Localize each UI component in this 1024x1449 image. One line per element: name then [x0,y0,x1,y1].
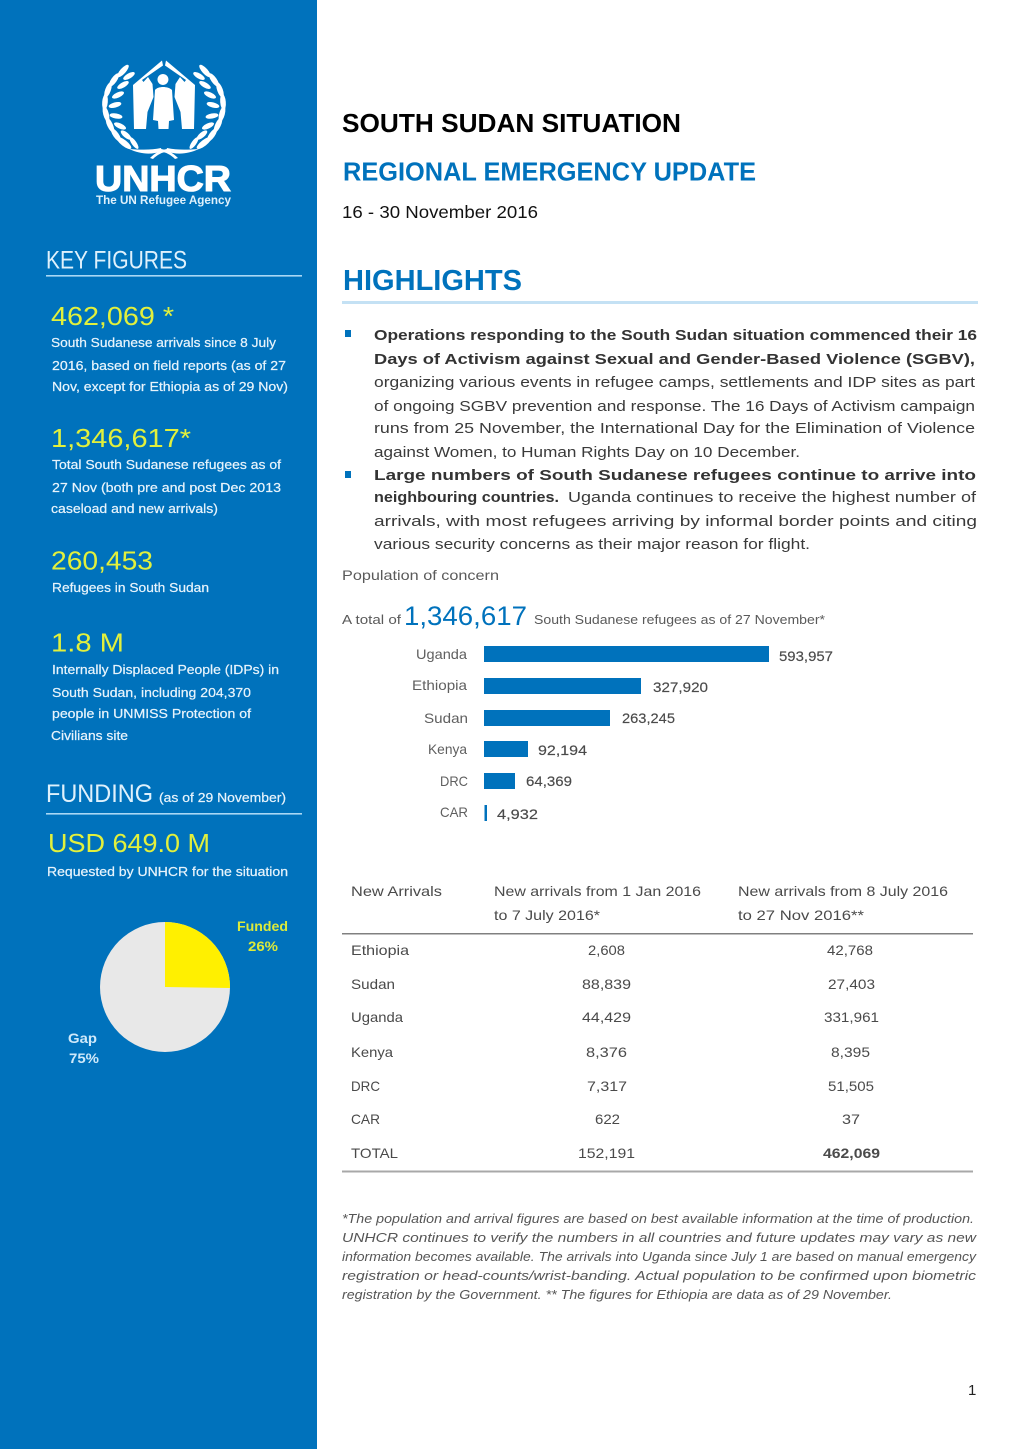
row: Kenya: 8,395 [831,1044,870,1060]
icon: wreath right [160,63,227,159]
pie chart: funding: Gap [68,1031,97,1046]
bullet text 1: of ongoing SGBV prevention and response. The 16 Days of Activism campaign [374,398,975,415]
text block: footnote: *The population and arrival figures are based on best available information at the time of production. [342,1212,974,1226]
row: total [342,1145,973,1172]
key figure: IDPs: people in UNMISS Protection of [52,707,252,721]
row: Kenya: Kenya [351,1044,393,1060]
key figure: refugees: Total South Sudanese refugees as of [52,458,282,472]
bullet text 2: neighbouring countries. [374,489,559,506]
callout: total refugees: South Sudanese refugees as of 27 November* [534,613,825,627]
row: Uganda [351,1009,879,1025]
row: total: TOTAL [351,1145,398,1161]
bullet text 1: Operations responding to the South Sudan situation commenced their 16 [374,327,977,344]
key figure: refugees [51,423,282,516]
row: Uganda: Uganda [351,1009,403,1025]
row: total: 152,191 [578,1145,635,1161]
bullet text 1: against Women, to Human Rights Day on 10 December. [374,444,800,461]
bullet marker 2 [345,471,351,478]
icon: wreath left [101,63,168,159]
table: new arrivals [342,883,973,1172]
key figure: refugees: 1,346,617* [51,423,191,453]
table header: New arrivals from 1 Jan 2016 [494,883,701,899]
row: Ethiopia [351,942,873,958]
bar: DRC [440,773,572,789]
callout: total refugees [342,601,825,631]
bullet text 1: runs from 25 November, the International Day for the Elimination of Violence [374,420,975,437]
funding amount: USD 649.0 M [48,828,210,858]
icon: sheltering hand right [165,60,195,129]
key figure: IDPs: Internally Displaced People (IDPs) in [52,663,279,677]
text block: highlights bullets [345,327,977,553]
key figure: IDPs: Civilians site [51,729,128,743]
heading: population of concern: Population of concern [342,567,499,583]
table header: New arrivals from 8 July 2016 [738,883,948,899]
bullet text 2 [374,467,977,553]
bullet marker 1 [345,330,351,337]
key figure: IDPs [51,628,279,743]
row: CAR: 37 [842,1111,860,1127]
key figure: arrivals: 462,069 * [51,301,174,331]
pie chart: funding: 75% [69,1051,99,1066]
text block: footnote: UNHCR continues to verify the numbers in all countries and future updates may vary as new [342,1231,977,1245]
row: Sudan: Sudan [351,976,395,992]
bar: Ethiopia: 327,920 [653,680,708,695]
text block: footnote: registration by the Government. ** The figures for Ethiopia are data as of 29 November. [342,1288,892,1302]
panel: sidebar background [0,0,317,1449]
table header: to 27 Nov 2016** [738,907,865,923]
row: total: 462,069 [823,1145,880,1161]
row: Ethiopia: 2,608 [588,942,625,958]
row: DRC: DRC [351,1078,380,1094]
pie chart: funding [68,919,288,1066]
bullet text 2: arrivals, with most refugees arriving by informal border points and citing [374,513,977,530]
bar: Ethiopia: Ethiopia [412,677,467,693]
bar: CAR: CAR [440,804,468,820]
callout: total refugees: 1,346,617 [404,601,527,631]
key figure: arrivals: Nov, except for Ethiopia as of 29 Nov) [52,380,288,394]
bar: Kenya: Kenya [428,741,467,757]
key figure: refugees: caseload and new arrivals) [51,502,218,516]
bar: Sudan: 263,245 [622,711,675,726]
table header: New Arrivals [351,883,442,899]
key figure: IDPs: South Sudan, including 204,370 [52,686,251,700]
text block: footnote [342,1212,977,1302]
table header [342,883,973,934]
date: 16 - 30 November 2016 [342,202,538,222]
page number: 1 [968,1382,976,1399]
row: CAR: CAR [351,1111,380,1127]
heading: highlights: HIGHLIGHTS [343,265,522,297]
bullet text 2: various security concerns as their major reason for flight. [374,536,810,553]
heading: funding [46,780,302,815]
row: Uganda: 331,961 [824,1009,879,1025]
key figure: refugees: 27 Nov (both pre and post Dec 2013 [52,481,281,495]
row: Sudan [351,976,875,992]
key figure: refugees in South Sudan: Refugees in South Sudan [52,581,209,595]
bar: Uganda: Uganda [416,646,467,662]
icon: UNHCR logo [95,60,232,207]
row: Sudan: 88,839 [582,976,631,992]
row: Kenya: 8,376 [586,1044,627,1060]
row: Ethiopia: 42,768 [827,942,873,958]
funding amount: Requested by UNHCR for the situation [47,865,288,879]
row: Sudan: 27,403 [828,976,875,992]
bar: Sudan [424,710,675,726]
bar: Ethiopia [412,677,708,695]
heading: funding: FUNDING [46,780,153,808]
bullet text 1: Days of Activism against Sexual and Gender-Based Violence (SGBV), [374,351,975,368]
bullet text 2: Large numbers of South Sudanese refugees continue to arrive into [374,467,976,484]
key figure: IDPs: 1.8 M [51,628,124,658]
pie chart: funding: Funded [237,919,288,934]
row: CAR [351,1111,860,1127]
table header: to 7 July 2016* [494,907,601,923]
bullet text 1: organizing various events in refugee camps, settlements and IDP sites as part [374,374,976,391]
icon: sheltering hand left [133,60,163,129]
logo wordmark: UNHCR [95,158,231,199]
bar: DRC: 64,369 [526,774,572,789]
text block: footnote: registration or head-counts/wrist-banding. Actual population to be confirmed upon biometric [342,1269,977,1283]
bar: Kenya: 92,194 [538,743,588,758]
heading: key figures: KEY FIGURES [46,246,187,274]
key figure: arrivals: South Sudanese arrivals since 8 July [51,336,277,350]
key figure: refugees in South Sudan [51,546,209,595]
key figure: arrivals [51,301,288,394]
text block: footnote: information becomes available. The arrivals into Uganda since July 1 are based on manual emergency [342,1250,977,1264]
logo tagline: The UN Refugee Agency [96,195,232,207]
key figure: arrivals: 2016, based on field reports (as of 27 [52,359,286,373]
row: Ethiopia: Ethiopia [351,942,409,958]
row: DRC: 7,317 [587,1078,627,1094]
bullet text 2: Uganda continues to receive the highest number of [568,489,977,506]
row: CAR: 622 [595,1111,620,1127]
heading: highlights [342,265,978,304]
row: Uganda: 44,429 [582,1009,631,1025]
bar: Kenya [428,741,588,758]
heading: funding: (as of 29 November) [159,791,286,805]
title: SOUTH SUDAN SITUATION [342,110,681,138]
callout: total refugees: A total of [342,612,401,627]
bar: Uganda [416,646,833,664]
funding amount [47,828,288,879]
pie chart: funding: 26% [248,939,278,954]
bullet text 1 [374,327,977,461]
bar: CAR [440,804,538,822]
row: Kenya [351,1044,870,1060]
bar: Uganda: 593,957 [779,649,833,664]
bar: Sudan: Sudan [424,710,468,726]
row: DRC: 51,505 [828,1078,874,1094]
bar: DRC: DRC [440,773,468,789]
subtitle: REGIONAL EMERGENCY UPDATE [343,158,756,186]
icon: person [153,74,174,129]
bar: CAR: 4,932 [497,807,538,822]
bar chart: refugees by country [412,646,833,822]
key figure: refugees in South Sudan: 260,453 [51,546,153,576]
row: DRC [351,1078,874,1094]
